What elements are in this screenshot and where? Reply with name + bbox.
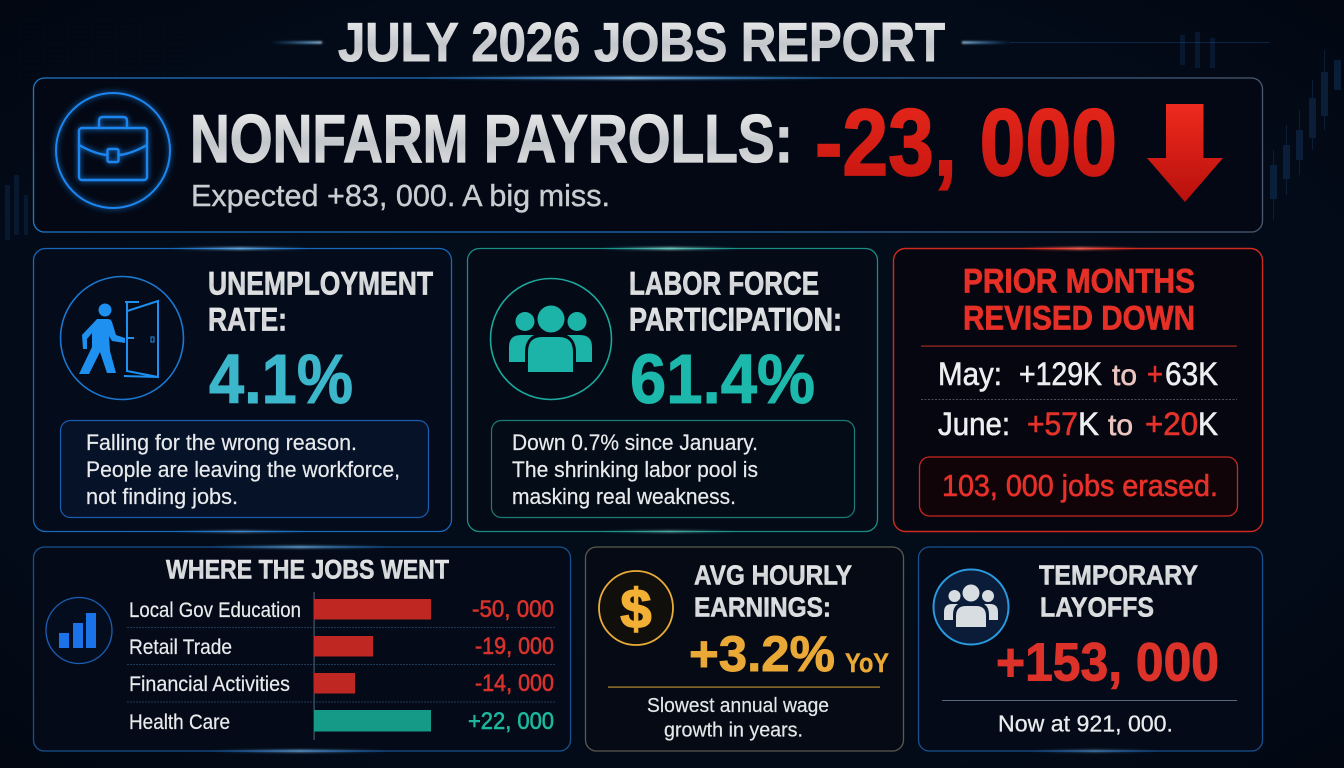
heading: labor force participation bbox=[629, 266, 842, 338]
row: June revision: +57 bbox=[1027, 406, 1078, 442]
heading: labor force participation: PARTICIPATION: bbox=[629, 302, 842, 338]
heading: temporary layoffs bbox=[1039, 560, 1198, 622]
row: retail trade: -19, 000 bbox=[475, 633, 554, 660]
callout: unemployment note: Falling for the wrong reason. bbox=[86, 430, 357, 455]
row: health care bbox=[129, 708, 554, 735]
callout: unemployment note: not finding jobs. bbox=[86, 484, 238, 509]
panel: where the jobs went bbox=[34, 546, 570, 752]
panel: average hourly earnings bbox=[586, 547, 904, 751]
row: local gov education bbox=[129, 596, 554, 623]
heading: avg hourly earnings: AVG HOURLY bbox=[694, 560, 852, 590]
text: slowest wage growth bbox=[647, 694, 829, 742]
row: retail trade: Retail Trade bbox=[129, 635, 232, 659]
panel: unemployment rate bbox=[34, 247, 452, 533]
value: 4.1%: 4.1% bbox=[209, 340, 353, 418]
row: June revision: June: bbox=[938, 406, 1010, 442]
text: expected: Expected +83, 000. A big miss. bbox=[191, 178, 610, 213]
icon: dollar coin bbox=[599, 571, 673, 645]
heading: avg hourly earnings: EARNINGS: bbox=[694, 592, 831, 622]
icon: person leaving through door bbox=[60, 276, 184, 400]
row: May revision: May: bbox=[938, 356, 1002, 392]
panel: labor force participation bbox=[468, 247, 878, 533]
row: June revision: K bbox=[1078, 406, 1099, 442]
callout: jobs erased bbox=[920, 457, 1238, 516]
row: health care: +22, 000 bbox=[468, 708, 554, 735]
value: +153,000: +153, 000 bbox=[996, 632, 1219, 692]
row: May revision: 63K bbox=[1165, 356, 1218, 392]
row: financial activities: -14, 000 bbox=[475, 670, 554, 697]
heading: avg hourly earnings bbox=[694, 560, 852, 622]
heading: unemployment rate bbox=[208, 266, 433, 338]
panel: prior months revised down bbox=[894, 247, 1262, 532]
icon: group of people bbox=[490, 278, 612, 400]
heading: prior months revised down: REVISED DOWN bbox=[963, 300, 1195, 338]
heading: unemployment rate: UNEMPLOYMENT bbox=[208, 266, 433, 302]
callout: participation note bbox=[492, 420, 854, 518]
value: 61.4%: 61.4% bbox=[630, 340, 815, 418]
heading: temporary layoffs: LAYOFFS bbox=[1040, 592, 1154, 622]
row: financial activities bbox=[129, 670, 554, 697]
row: June revision bbox=[938, 406, 1218, 442]
heading: prior months revised down bbox=[963, 262, 1195, 338]
row: health care: Health Care bbox=[129, 710, 230, 734]
callout: unemployment note: People are leaving the workforce, bbox=[86, 457, 400, 482]
callout: participation note: masking real weakness. bbox=[512, 484, 736, 509]
text: slowest wage growth: growth in years. bbox=[664, 718, 803, 742]
value: +3.2% YoY: +3.2% bbox=[689, 626, 835, 682]
row: May revision: +129K bbox=[1019, 356, 1102, 392]
value: +3.2% YoY: YoY bbox=[845, 648, 889, 678]
row: local gov education: -50, 000 bbox=[472, 596, 554, 623]
icon: bar chart bbox=[46, 598, 112, 664]
row: June revision: to bbox=[1108, 409, 1133, 442]
text: slowest wage growth: Slowest annual wage bbox=[647, 694, 829, 717]
icon: dollar coin: $ bbox=[620, 577, 652, 640]
row: May revision: to bbox=[1112, 359, 1137, 392]
panel: nonfarm payrolls bbox=[34, 76, 1262, 232]
heading: labor force participation: LABOR FORCE bbox=[629, 266, 819, 302]
title: JULY 2026 JOBS REPORT bbox=[338, 11, 945, 73]
arrow: down bbox=[1147, 104, 1223, 202]
row: May revision: + bbox=[1147, 356, 1163, 392]
icon: people group bbox=[934, 570, 1008, 644]
value: -23,000: -23, 000 bbox=[815, 90, 1117, 196]
row: June revision: K bbox=[1198, 406, 1218, 442]
row: May revision bbox=[938, 356, 1218, 392]
heading: temporary layoffs: TEMPORARY bbox=[1039, 560, 1198, 590]
panel: temporary layoffs bbox=[918, 547, 1262, 752]
row: financial activities: Financial Activities bbox=[129, 672, 290, 696]
row: retail trade bbox=[129, 633, 554, 660]
bar chart: job changes by sector bbox=[127, 592, 556, 740]
text: now at 921,000: Now at 921, 000. bbox=[998, 710, 1173, 736]
heading: nonfarm payrolls: NONFARM PAYROLLS: bbox=[190, 101, 793, 177]
icon: briefcase bbox=[56, 93, 170, 208]
heading: where the jobs went: WHERE THE JOBS WENT bbox=[166, 554, 449, 584]
callout: participation note: Down 0.7% since January. bbox=[512, 430, 758, 455]
row: local gov education: Local Gov Education bbox=[129, 598, 301, 622]
heading: prior months revised down: PRIOR MONTHS bbox=[963, 262, 1195, 300]
callout: participation note: The shrinking labor pool is bbox=[512, 457, 758, 482]
row: June revision: +20 bbox=[1145, 406, 1198, 442]
callout: jobs erased: 103, 000 jobs erased. bbox=[942, 468, 1218, 503]
heading: unemployment rate: RATE: bbox=[208, 302, 287, 338]
callout: unemployment note bbox=[60, 420, 428, 518]
